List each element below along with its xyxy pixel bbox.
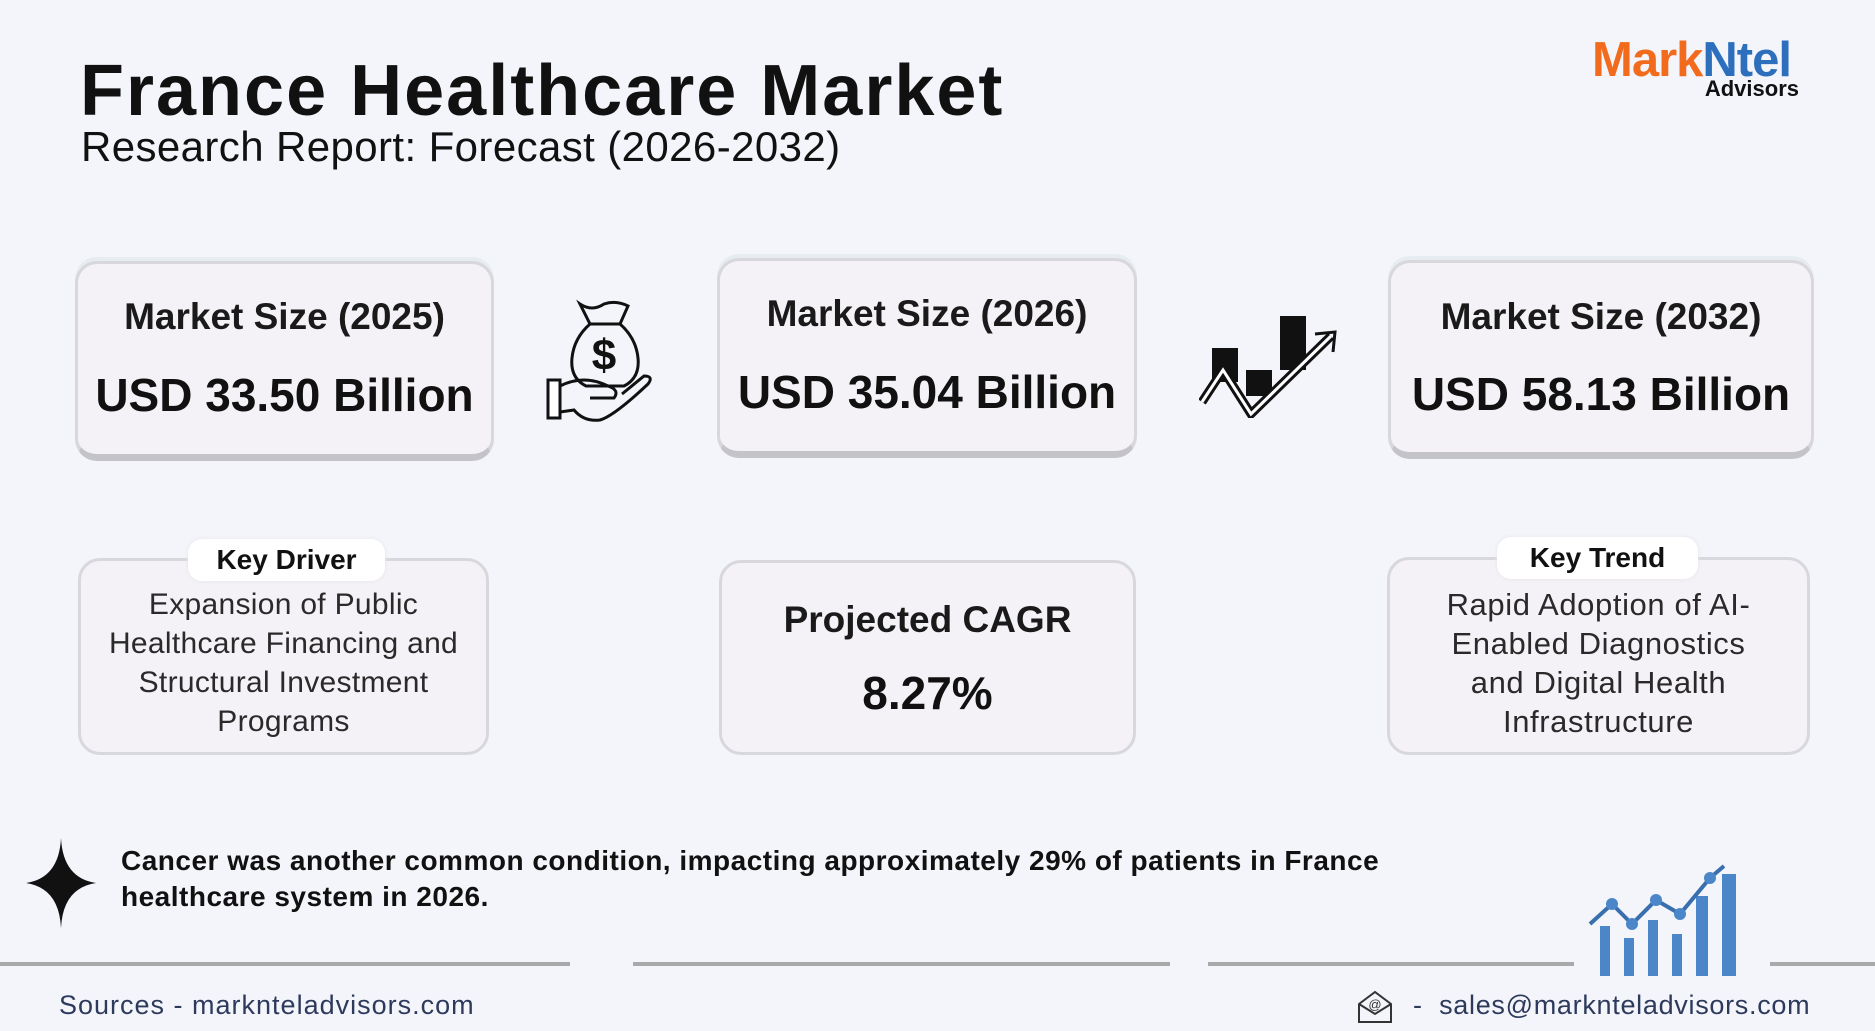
panel: projected CAGR: 8.27%: [862, 667, 993, 719]
icon: email: @: [1368, 997, 1382, 1012]
trend text: and Digital Health: [1471, 665, 1726, 700]
key driver tag: Key Driver: [216, 544, 357, 575]
key trend tag: [1497, 537, 1698, 579]
subtitle: Research Report: Forecast (2026-2032): [81, 123, 840, 170]
panel: market size 2026: USD 35.04 Billion: [738, 366, 1116, 418]
panel: market size 2026: [717, 258, 1137, 458]
panel: market size 2026: Market Size (2026): [767, 293, 1087, 334]
icon: sparkle star: [26, 838, 96, 928]
trend text: Infrastructure: [1503, 704, 1694, 739]
logo: Advisors: [1705, 76, 1799, 101]
trend text: Enabled Diagnostics: [1451, 626, 1746, 661]
panel: market size 2032: USD 58.13 Billion: [1412, 368, 1790, 420]
driver text: Programs: [217, 705, 350, 738]
driver text: [109, 588, 458, 738]
panel: projected CAGR: Projected CAGR: [784, 599, 1071, 640]
key trend tag: Key Trend: [1530, 542, 1665, 573]
panel: key driver: [78, 558, 489, 755]
panel: market size 2025: USD 33.50 Billion: [95, 369, 474, 421]
driver text: Healthcare Financing and: [109, 627, 458, 660]
callout text: healthcare system in 2026.: [121, 881, 489, 912]
icon: money bag in hand: [546, 300, 652, 422]
callout text: Cancer was another common condition, impacting approximately 29% of patients in France: [121, 845, 1379, 876]
panel: projected CAGR: [719, 560, 1136, 755]
icon: blue bar chart: [1588, 864, 1736, 976]
icon: email: [1358, 990, 1392, 1023]
icon: money bag in hand: $: [592, 331, 616, 380]
sources text: Sources - marknteladvisors.com: [59, 990, 475, 1020]
callout text: [121, 845, 1379, 912]
panel: market size 2032: Market Size (2032): [1441, 296, 1761, 337]
logo: MarkNtel: [1592, 33, 1791, 87]
trend text: [1447, 587, 1750, 739]
driver text: Expansion of Public: [149, 588, 418, 621]
email text: - sales@marknteladvisors.com: [1413, 990, 1810, 1020]
title: France Healthcare Market: [80, 51, 1004, 131]
trend text: Rapid Adoption of AI-: [1447, 587, 1750, 622]
key driver tag: [188, 539, 385, 581]
panel: market size 2025: [75, 261, 494, 461]
panel: key trend: [1387, 557, 1810, 755]
panel: market size 2032: [1388, 260, 1814, 459]
driver text: Structural Investment: [139, 666, 428, 699]
icon: growth chart: [1199, 316, 1337, 418]
panel: market size 2025: Market Size (2025): [124, 296, 445, 337]
